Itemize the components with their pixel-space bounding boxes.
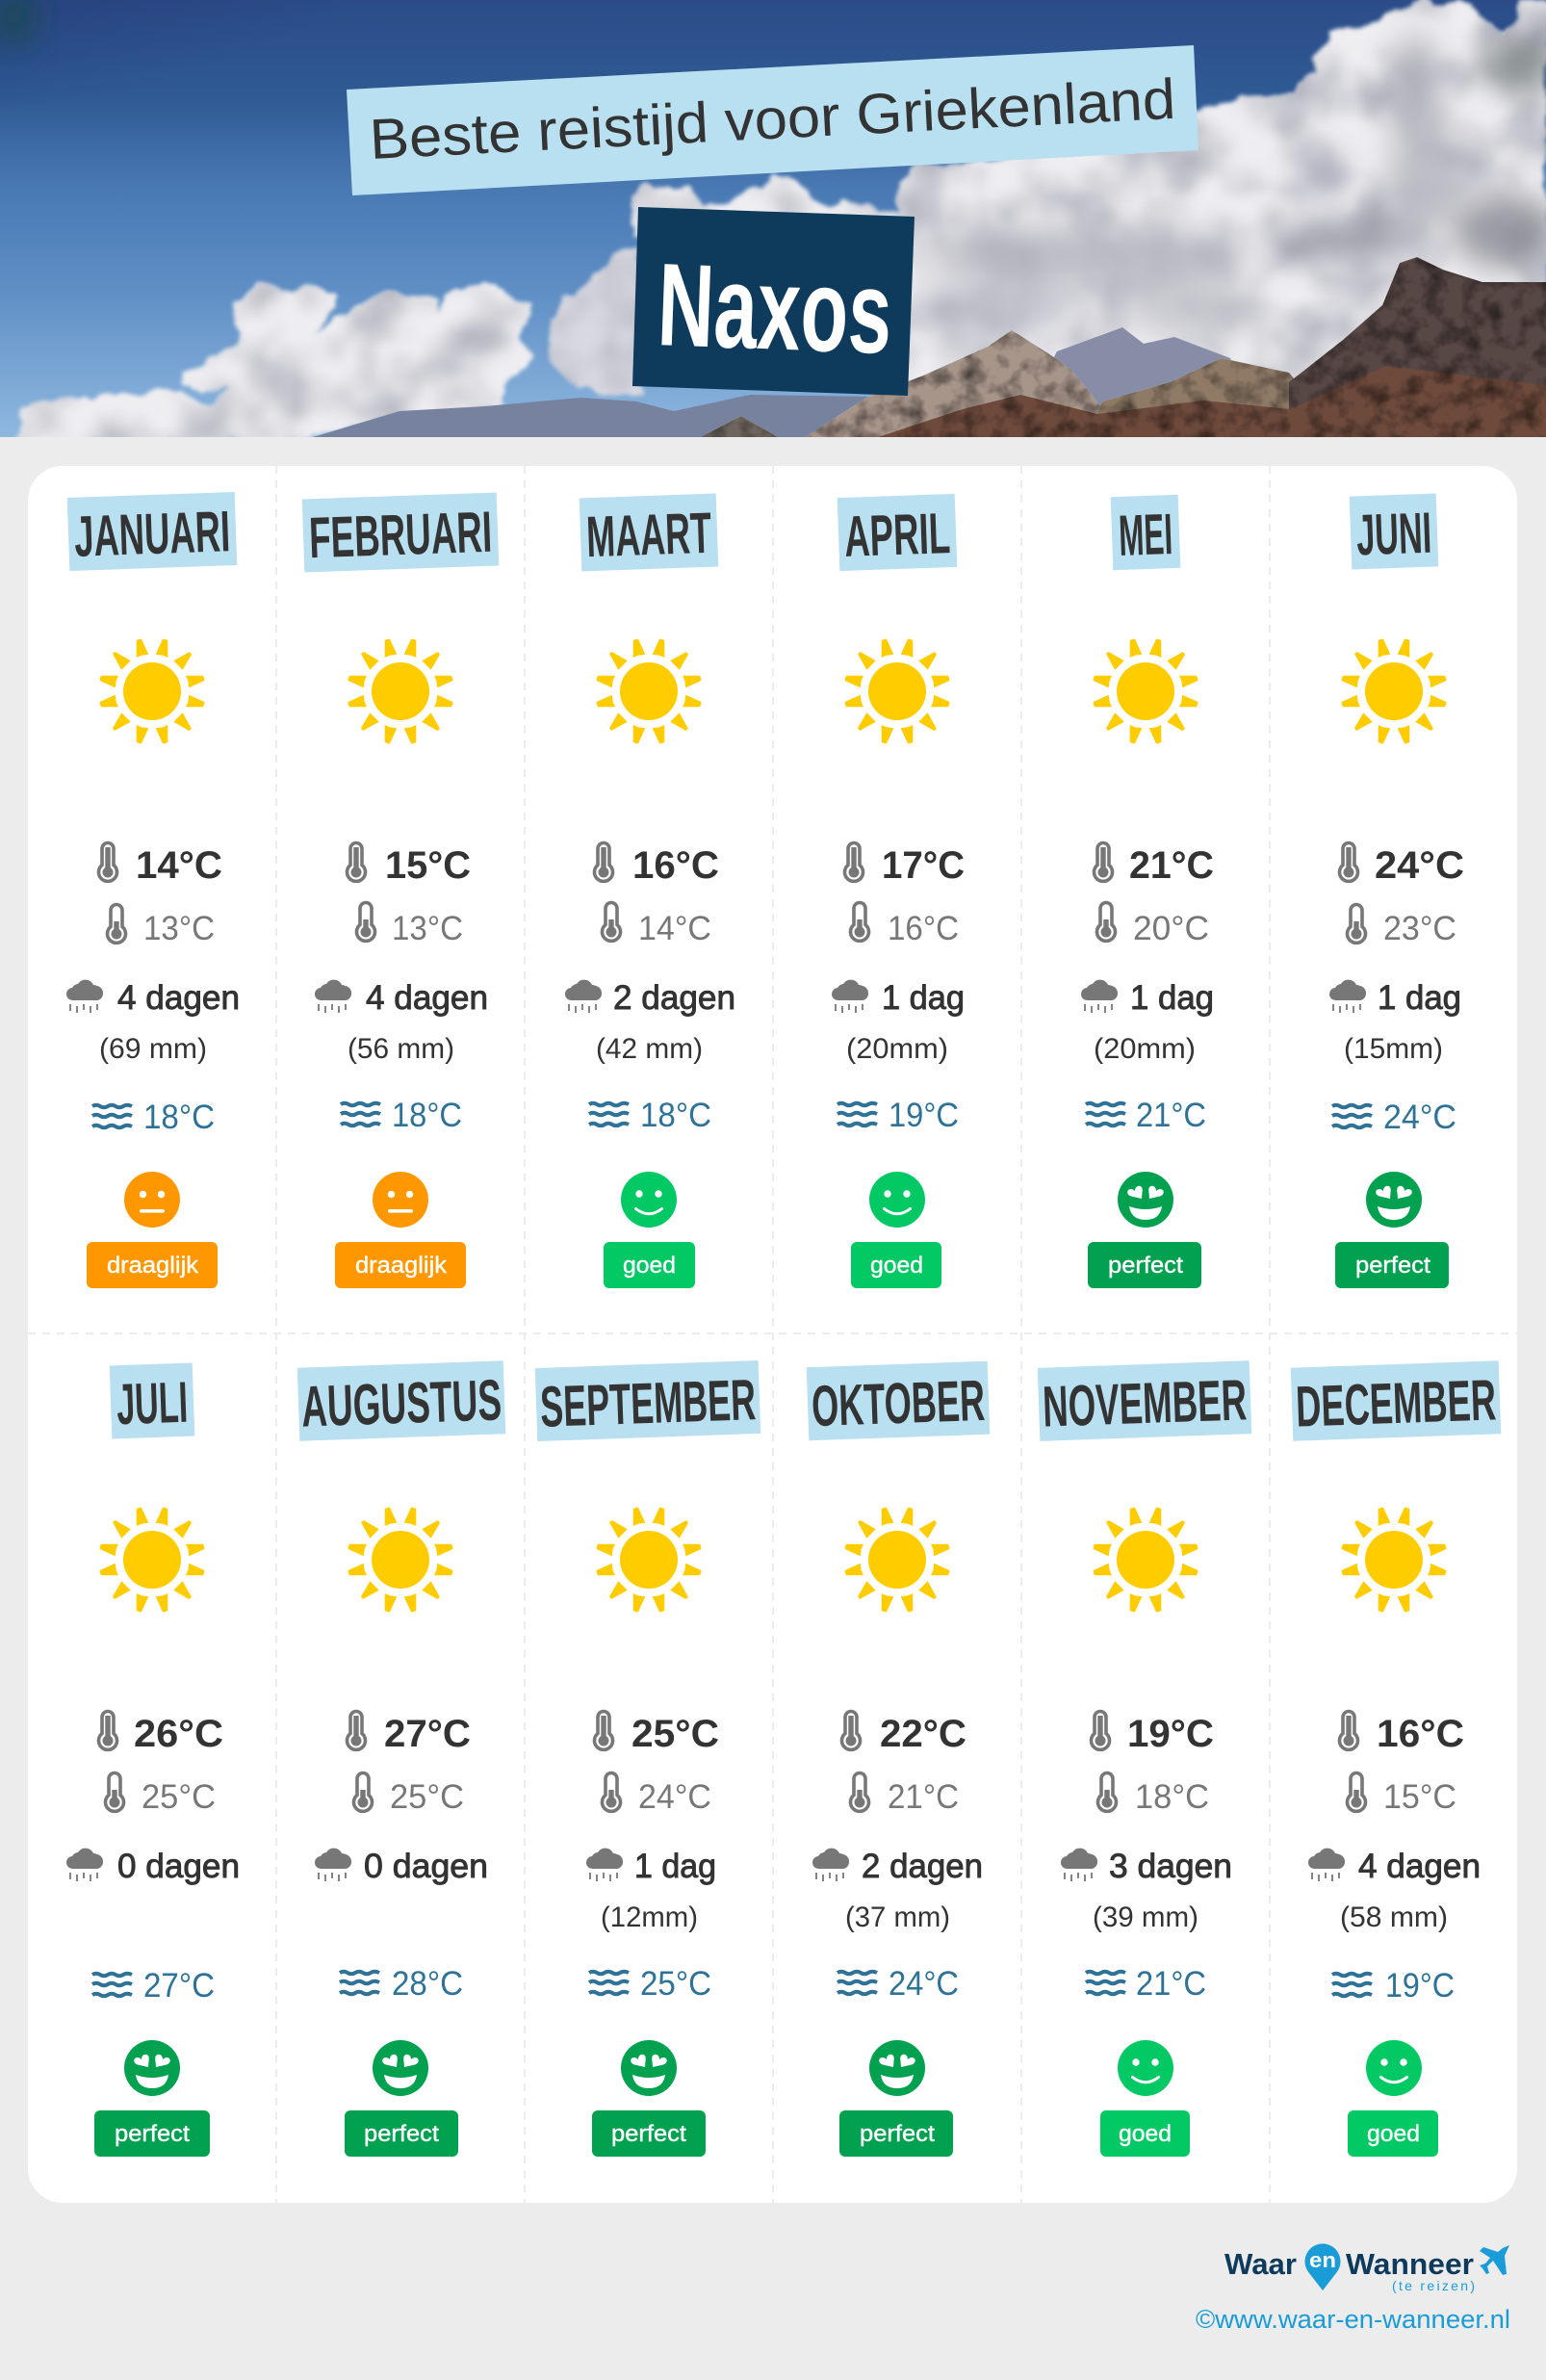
min temperature bbox=[851, 1773, 959, 1816]
sea temperature: 27°C bbox=[143, 1967, 215, 2005]
rating badge bbox=[1335, 1242, 1449, 1288]
rain days: 0 dagen bbox=[364, 1848, 488, 1885]
max temperature: 15°C bbox=[385, 844, 471, 887]
max temperature bbox=[1340, 1712, 1464, 1755]
icon: rating face bbox=[373, 1172, 428, 1228]
max temperature bbox=[1092, 1712, 1214, 1755]
max temperature bbox=[595, 843, 719, 887]
rain days: 1 dag bbox=[634, 1848, 716, 1885]
max temperature bbox=[841, 1712, 966, 1755]
rating badge bbox=[87, 1242, 218, 1288]
rain days bbox=[832, 979, 965, 1017]
sea temperature: 24°C bbox=[1383, 1099, 1456, 1136]
rain days: 4 dagen bbox=[117, 979, 240, 1017]
month label: november: NOVEMBER bbox=[1042, 1367, 1248, 1439]
icon: rating face bbox=[621, 1172, 677, 1228]
rain days: 4 dagen bbox=[1358, 1848, 1481, 1885]
max temperature: 24°C bbox=[1375, 844, 1464, 887]
month label: september bbox=[535, 1360, 760, 1441]
panel: juni bbox=[1329, 493, 1464, 1288]
min temperature: 25°C bbox=[142, 1778, 216, 1816]
icon: sun bbox=[845, 1508, 949, 1612]
sea temperature bbox=[1332, 1099, 1456, 1136]
rain days: 1 dag bbox=[882, 979, 965, 1017]
month label: januari: JANUARI bbox=[73, 499, 231, 569]
rain days: 1 dag bbox=[1378, 979, 1461, 1017]
sea temperature bbox=[1086, 1097, 1206, 1134]
sea temperature: 21°C bbox=[1136, 1965, 1206, 2003]
icon: sun bbox=[1342, 639, 1446, 743]
icon: rating face bbox=[621, 2040, 677, 2096]
min temperature bbox=[356, 903, 463, 947]
icon: rating face bbox=[1118, 2040, 1173, 2096]
max temperature: 25°C bbox=[631, 1713, 719, 1755]
icon: sun bbox=[597, 639, 701, 743]
sea temperature: 19°C bbox=[1385, 1967, 1455, 2005]
rating badge: perfect bbox=[1355, 1253, 1430, 1279]
rating badge bbox=[839, 2110, 953, 2157]
copyright url: ©www.waar-en-wanneer.nl bbox=[1196, 2305, 1510, 2334]
icon: location pin: en bbox=[1309, 2248, 1336, 2272]
sea temperature bbox=[92, 1967, 215, 2005]
max temperature bbox=[595, 1712, 719, 1755]
sea temperature bbox=[1086, 1965, 1206, 2003]
destination banner: Naxos bbox=[632, 207, 915, 396]
max temperature bbox=[347, 843, 471, 887]
max temperature: 16°C bbox=[632, 844, 719, 887]
month label: juni bbox=[1350, 493, 1438, 570]
panel: juli bbox=[66, 1363, 240, 2157]
month label: oktober: OKTOBER bbox=[811, 1368, 986, 1438]
month label: september: SEPTEMBER bbox=[539, 1367, 757, 1439]
max temperature: 22°C bbox=[880, 1713, 966, 1755]
title banner bbox=[347, 45, 1198, 195]
logo: Waar en Wanneer: Waar bbox=[1224, 2247, 1297, 2281]
max temperature: 17°C bbox=[882, 844, 965, 887]
logo: Waar en Wanneer: (te reizen) bbox=[1392, 2278, 1475, 2293]
rating badge: perfect bbox=[1108, 1253, 1183, 1279]
month label: april: APRIL bbox=[843, 501, 951, 569]
icon: rating face bbox=[124, 2040, 180, 2096]
panel: november bbox=[1038, 1360, 1251, 2157]
icon: sun bbox=[100, 639, 204, 743]
icon: location pin bbox=[1305, 2243, 1340, 2290]
month label: maart: MAART bbox=[585, 501, 712, 569]
panel: maart bbox=[565, 494, 735, 1288]
rating badge: perfect bbox=[611, 2121, 686, 2147]
rainfall: (12mm) bbox=[601, 1901, 698, 1933]
max temperature: 21°C bbox=[1129, 844, 1214, 887]
rainfall: (58 mm) bbox=[1340, 1901, 1448, 1933]
panel: mei bbox=[1081, 495, 1214, 1288]
rating badge: goed bbox=[1119, 2121, 1172, 2147]
month label: februari bbox=[302, 492, 499, 573]
rating badge: goed bbox=[1367, 2121, 1420, 2147]
rainfall: (37 mm) bbox=[845, 1901, 950, 1933]
panel: oktober bbox=[807, 1361, 990, 2157]
sea temperature bbox=[1332, 1967, 1455, 2005]
max temperature: 26°C bbox=[134, 1713, 223, 1755]
icon: sun bbox=[100, 1508, 204, 1612]
rating badge bbox=[1348, 2110, 1438, 2157]
icon: rating face bbox=[1366, 1172, 1422, 1228]
rain days: 4 dagen bbox=[366, 979, 488, 1017]
title banner: Beste reistijd voor Griekenland bbox=[368, 67, 1177, 171]
icon: rating face bbox=[869, 2040, 925, 2096]
sea temperature bbox=[837, 1097, 959, 1134]
sea temperature: 18°C bbox=[640, 1097, 711, 1134]
panel: climate table card bbox=[28, 466, 1517, 2203]
max temperature bbox=[98, 1712, 223, 1755]
rating badge bbox=[604, 1242, 695, 1288]
max temperature bbox=[845, 843, 965, 887]
rain days: 2 dagen bbox=[613, 979, 735, 1017]
logo: Waar en Wanneer: Wanneer bbox=[1346, 2247, 1474, 2281]
max temperature bbox=[347, 1712, 471, 1755]
rain days bbox=[1081, 979, 1214, 1017]
month label: januari bbox=[67, 492, 237, 571]
min temperature: 20°C bbox=[1133, 910, 1209, 947]
icon: sun bbox=[1342, 1508, 1446, 1612]
rating badge: draaglijk bbox=[107, 1253, 199, 1279]
icon: rating face bbox=[124, 1172, 180, 1228]
min temperature: 21°C bbox=[888, 1778, 959, 1816]
month label: augustus: AUGUSTUS bbox=[300, 1367, 502, 1439]
min temperature: 13°C bbox=[143, 910, 215, 947]
min temperature bbox=[106, 1773, 216, 1816]
month label: juli: JULI bbox=[116, 1370, 189, 1436]
sea temperature bbox=[341, 1097, 462, 1134]
panel: april bbox=[832, 494, 965, 1288]
icon: sun bbox=[597, 1508, 701, 1612]
rating badge: perfect bbox=[364, 2121, 439, 2147]
sea temperature bbox=[837, 1965, 959, 2003]
min temperature bbox=[1097, 1773, 1209, 1816]
min temperature bbox=[603, 1773, 711, 1816]
min temperature: 14°C bbox=[638, 910, 711, 947]
rating badge: perfect bbox=[115, 2121, 190, 2147]
rating badge: draaglijk bbox=[355, 1253, 448, 1279]
panel: februari bbox=[302, 492, 499, 1288]
sea temperature: 18°C bbox=[143, 1099, 215, 1136]
sea temperature bbox=[589, 1965, 711, 2003]
rainfall: (15mm) bbox=[1344, 1033, 1443, 1065]
rain days: 1 dag bbox=[1130, 979, 1214, 1017]
rating badge bbox=[94, 2110, 210, 2157]
month label: mei bbox=[1111, 495, 1180, 570]
rainfall: (20mm) bbox=[846, 1033, 948, 1065]
panel: augustus bbox=[297, 1360, 505, 2157]
max temperature bbox=[98, 843, 222, 887]
min temperature bbox=[1097, 903, 1209, 947]
month label: mei: MEI bbox=[1118, 502, 1173, 568]
month label: juni: JUNI bbox=[1355, 501, 1432, 567]
sea temperature: 18°C bbox=[392, 1097, 462, 1134]
max temperature bbox=[1340, 843, 1464, 887]
rating badge bbox=[851, 1242, 941, 1288]
max temperature bbox=[1094, 843, 1214, 887]
month label: november bbox=[1038, 1360, 1251, 1441]
logo: Waar en Wanneer bbox=[1224, 2243, 1509, 2293]
rain days bbox=[1329, 979, 1461, 1017]
icon: rating face bbox=[1118, 1172, 1173, 1228]
month label: april bbox=[837, 494, 957, 571]
min temperature: 24°C bbox=[638, 1778, 711, 1816]
sea temperature: 28°C bbox=[392, 1965, 463, 2003]
min temperature bbox=[1348, 905, 1456, 947]
rainfall: (42 mm) bbox=[596, 1033, 703, 1065]
icon: sun bbox=[1094, 1508, 1198, 1612]
min temperature: 23°C bbox=[1383, 910, 1456, 947]
rating badge bbox=[345, 2110, 458, 2157]
min temperature bbox=[108, 905, 215, 947]
max temperature: 27°C bbox=[384, 1713, 471, 1755]
min temperature bbox=[851, 903, 959, 947]
icon: sun bbox=[348, 1508, 452, 1612]
rating badge bbox=[1088, 1242, 1201, 1288]
max temperature: 19°C bbox=[1127, 1713, 1214, 1755]
rating badge: goed bbox=[623, 1253, 676, 1279]
min temperature bbox=[1348, 1773, 1456, 1816]
min temperature bbox=[603, 903, 711, 947]
sea temperature: 21°C bbox=[1136, 1097, 1206, 1134]
rating badge bbox=[335, 1242, 466, 1288]
min temperature: 25°C bbox=[390, 1778, 464, 1816]
rating badge bbox=[1100, 2110, 1190, 2157]
rating badge bbox=[592, 2110, 706, 2157]
month label: augustus bbox=[297, 1360, 505, 1441]
icon: sun bbox=[845, 639, 949, 743]
sea temperature bbox=[589, 1097, 711, 1134]
rain days: 0 dagen bbox=[117, 1848, 240, 1885]
month label: februari: FEBRUARI bbox=[308, 500, 493, 570]
min temperature bbox=[354, 1773, 464, 1816]
sea temperature: 24°C bbox=[889, 1965, 959, 2003]
icon: rating face bbox=[373, 2040, 428, 2096]
icon: rating face bbox=[869, 1172, 925, 1228]
panel: september bbox=[535, 1360, 760, 2157]
icon: sun bbox=[348, 639, 452, 743]
rainfall: (39 mm) bbox=[1093, 1901, 1198, 1933]
max temperature: 14°C bbox=[136, 844, 222, 887]
max temperature: 16°C bbox=[1377, 1713, 1464, 1755]
rain days: 3 dagen bbox=[1109, 1848, 1232, 1885]
min temperature: 18°C bbox=[1135, 1778, 1209, 1816]
sea temperature: 19°C bbox=[889, 1097, 959, 1134]
sea temperature bbox=[340, 1965, 463, 2003]
rainfall: (20mm) bbox=[1094, 1033, 1196, 1065]
month label: juli bbox=[110, 1363, 194, 1438]
panel: december bbox=[1291, 1360, 1501, 2157]
sea temperature bbox=[92, 1099, 215, 1136]
rainfall: (56 mm) bbox=[348, 1033, 454, 1065]
rating badge: goed bbox=[870, 1253, 923, 1279]
icon: airplane bbox=[1480, 2245, 1509, 2275]
min temperature: 16°C bbox=[888, 910, 959, 947]
rain days bbox=[586, 1848, 716, 1885]
month label: oktober bbox=[807, 1361, 990, 1440]
icon: rating face bbox=[1366, 2040, 1422, 2096]
min temperature: 15°C bbox=[1383, 1778, 1456, 1816]
month label: maart bbox=[580, 494, 718, 571]
min temperature: 13°C bbox=[392, 910, 463, 947]
rating badge: perfect bbox=[860, 2121, 935, 2147]
rainfall: (69 mm) bbox=[99, 1033, 207, 1065]
rain days: 2 dagen bbox=[862, 1848, 983, 1885]
destination banner: Naxos: Naxos bbox=[656, 239, 894, 378]
sea temperature: 25°C bbox=[640, 1965, 711, 2003]
panel: januari bbox=[66, 492, 240, 1288]
icon: sun bbox=[1094, 639, 1198, 743]
header photo: sky, clouds and mountains bbox=[0, 0, 1546, 441]
